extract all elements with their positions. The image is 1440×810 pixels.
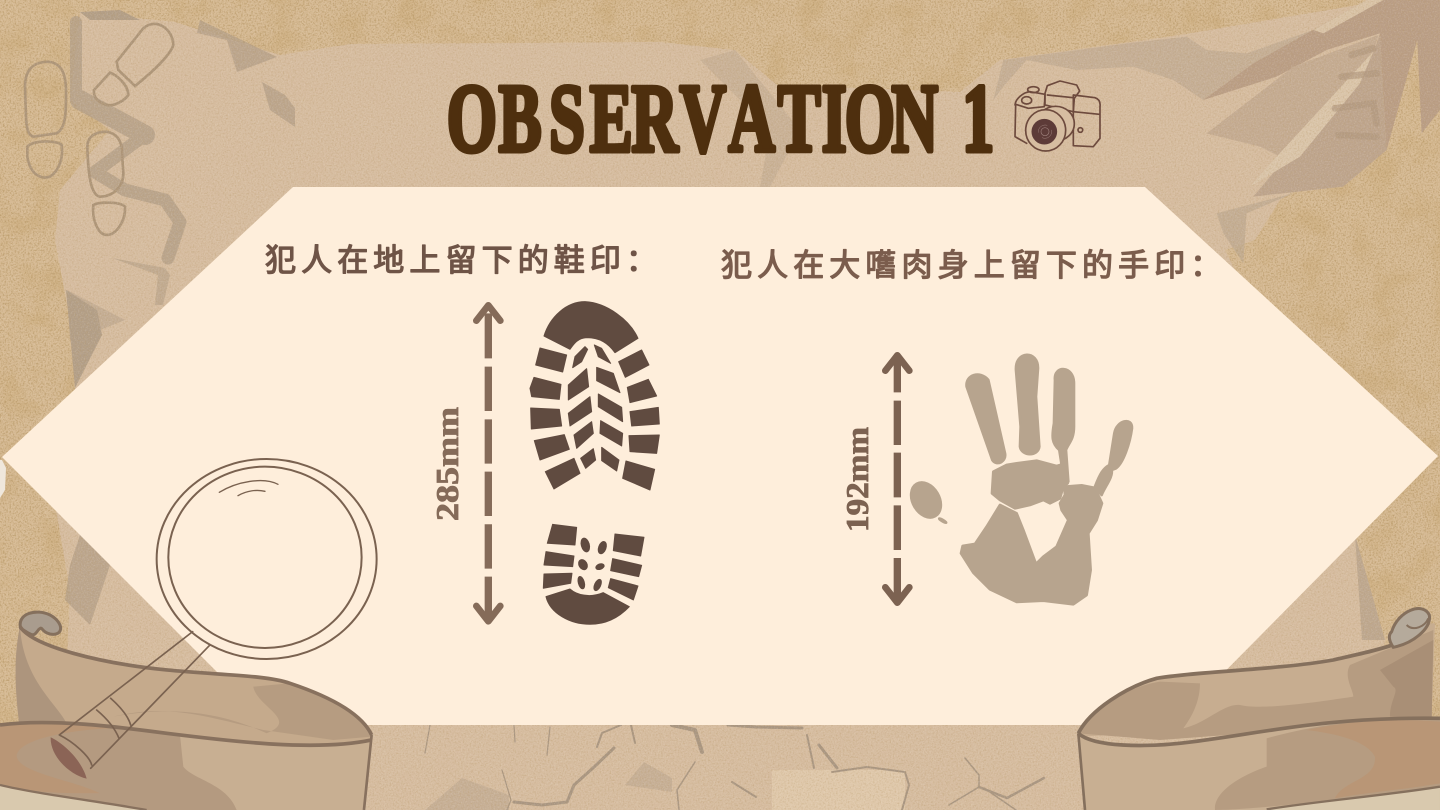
heel lugs <box>543 524 644 600</box>
arrow: hand length <box>885 355 909 603</box>
palm leaf shadows <box>993 0 1440 263</box>
shoe print <box>530 302 659 624</box>
handle <box>59 632 210 768</box>
heading: shoe print: 犯人在地上留下的鞋印： <box>265 235 662 280</box>
footprint outlines <box>25 24 173 235</box>
lens glare <box>219 481 278 496</box>
camera body <box>1073 95 1100 147</box>
torn white edge <box>0 460 6 498</box>
lens <box>1037 106 1074 141</box>
icon: magnifying glass <box>51 459 377 779</box>
label: 192mm: 192mm <box>839 427 875 532</box>
hand print <box>905 355 1132 604</box>
toe <box>544 302 638 353</box>
scroll: right <box>1078 609 1440 810</box>
handle cap <box>51 737 87 779</box>
scroll: left <box>0 612 372 810</box>
label: 285mm: 285mm <box>429 407 465 521</box>
arrow: shoe length <box>476 305 500 621</box>
heading: hand print: 犯人在大嚿肉身上留下的手印： <box>721 240 1226 285</box>
folded paper shadows, upper left <box>76 22 180 258</box>
cracked ground <box>425 725 1044 810</box>
icon: camera <box>1015 81 1100 151</box>
lens rings <box>157 459 377 659</box>
title: OBSERVATION 1 <box>447 64 994 172</box>
panel: cream hexagon <box>2 187 1438 725</box>
sole lugs <box>530 345 659 490</box>
